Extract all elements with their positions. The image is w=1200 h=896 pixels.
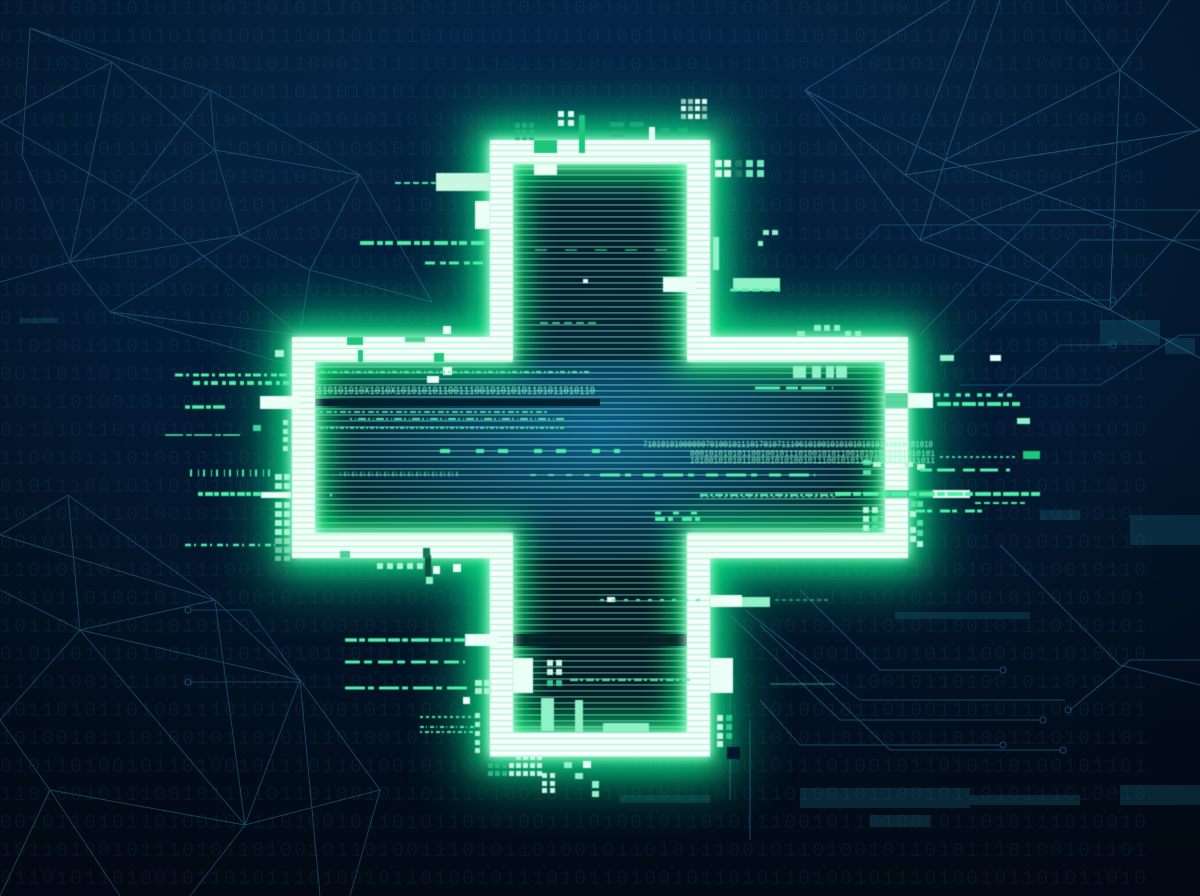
- faint binary code background: 1101001110110100101101011010010111001101011011010010111011010101101001110101101010: [0, 336, 1148, 359]
- bright glitch blocks: [260, 115, 1040, 797]
- bottom pixels: [488, 660, 732, 793]
- faint binary code background: 1101001011010111001011101001101011010010111010110100101101011010011101011010010110: [0, 560, 1148, 583]
- faint binary code background: 1011001011101011010011011101010011011010110100101101110100110101101001011011010101: [0, 280, 1148, 303]
- faint binary code background: 1110100101101011010010111011010010110100111010110100101101011100101101001011010111: [0, 672, 1148, 695]
- network mesh: top right: [805, 0, 1200, 358]
- left pixels: [253, 350, 491, 753]
- faint binary code background: 1011010011101011101001011011010110101110011010010111011010101101001110101101011101: [0, 139, 1148, 162]
- faint binary code background: 0101110110100101101011101011010010111011010110101110100101101011010010111011010110: [0, 252, 1148, 275]
- right streaks: [935, 393, 1015, 397]
- faint binary code background: 1010010111010010110101110100101101011010011011010010111010110100101101001110101101: [0, 728, 1148, 751]
- data streaks: [165, 183, 1040, 732]
- faint binary code background: 0011010110100111010110100101110100101101011010010110111010010110100110101110100101: [0, 700, 1148, 723]
- cross outer glow: [304, 152, 896, 745]
- scan lines: [315, 168, 885, 733]
- network mesh: bottom left: [0, 495, 380, 896]
- inside streaks: [320, 371, 590, 373]
- faint binary code background: 0110111001011011010111010101101110110110101101110110010110111010101101011101100110: [0, 110, 1148, 133]
- glowing binary code text: [317, 386, 935, 466]
- faint binary code background: 1011101001011010111001011011010011101011010010110111010110100101101011101101001011: [0, 392, 1148, 415]
- right pixels: [863, 460, 925, 547]
- faint binary code background: 0011011010111010110010110101110100101101011101001011010110100101110101101001011011: [0, 364, 1148, 387]
- faint binary code background: 0010110101101001011101001011010110101001110100101101011100101101001011010111010010: [0, 812, 1148, 835]
- faint binary code background: 1011010010110101101110100101101001110101101001011011101001010110101100101110100101: [0, 616, 1148, 639]
- blue core light: [342, 335, 858, 558]
- dark shade in upper arm: [514, 299, 684, 360]
- faint binary code background: 0010111010110100110101101001011101011010010110101110010110100111010110100101101110: [0, 532, 1148, 555]
- top pixels: [558, 99, 764, 177]
- faint binary code background: 1011010110100101110100101101011101001011010011011101001011010110100101110110100101: [0, 504, 1148, 527]
- faint glitch bars: right and bottom: [20, 318, 1200, 827]
- mint blocks: [426, 230, 1030, 797]
- faint binary code background: 1011010010111010110100101101001110101101001011010111001011010010110101110100101101: [0, 840, 1148, 863]
- glowing binary code text: 0001010101011001001011101001010110010101010101010101: [690, 449, 935, 459]
- dark shade in lower arm: [524, 560, 674, 702]
- cross interior: [300, 150, 900, 750]
- dark navy square: [727, 747, 740, 759]
- faint binary code background: 1010110101111010110110110101011011011011001110101101010010111011010011101101011011: [0, 82, 1148, 105]
- glowing binary code text: 71010101000090701001011101701071110610100101010101010101010101010: [643, 439, 933, 450]
- faint binary code background: 1100101110100101101101010111010010110101101001011101011010010111010010110101110101: [0, 448, 1148, 471]
- network mesh: top left: [0, 28, 432, 365]
- faint binary code background: 0101101110100101101001011010111001011010110100101110101101001011010111001011010010: [0, 644, 1148, 667]
- glowing binary code text: 110101010X1010X10101010110011100101010101101011010110: [317, 386, 595, 398]
- cross neon outline: [292, 140, 908, 757]
- faint binary code background: 0011010111011001011011000111111011110111010010111011011100010101101101011100101101: [0, 54, 1148, 77]
- inner green edge glow: [304, 152, 896, 745]
- faint binary code background: 0110101101001011010111010010110100101110101101001011010110100101110100101101011010: [0, 868, 1148, 891]
- faint binary code background: 1101011101001011010110100111011010111010011011010111001011011010110101110100101101: [0, 167, 1148, 190]
- circuit traces: lower right: [185, 545, 1200, 840]
- pixel grids around the cross: [253, 99, 925, 793]
- glitch dark bands: [315, 399, 600, 406]
- faint binary code background: 0110110100101110101101001011101101011001011010111010110100101110100110101101110100: [0, 308, 1148, 331]
- faint binary code background: 0101110010110101101001011010111010010110111010011010110101101001011100101101011010: [0, 476, 1148, 499]
- faint binary code background: 1110101001011011101011010010110101101001011101100101101011101001101011011010010111: [0, 224, 1148, 247]
- faint binary code background: 0110110100101110100101101011101001011010110101001011101010010110101110010110101101: [0, 588, 1148, 611]
- faint binary code background: 0010110110111010010110111010110110010111010110100110111010011010111011010010111010: [0, 195, 1148, 218]
- left streaks: [175, 374, 290, 376]
- faint binary code background: 0101101001011010010111011010010110101110100101101011001011101001011010110100101101: [0, 756, 1148, 779]
- glowing binary code text: 1010010101011001010101001011100101011010010101011011: [690, 457, 935, 466]
- faint binary code background: 0110101101001011101100110101001011011101001110101101001101011010110100101110011010: [0, 420, 1148, 443]
- faint binary code background: 0101100111010110100111011010110100101110110100110101110101001011011010111010011010: [0, 26, 1148, 49]
- green blocks: [340, 115, 1040, 577]
- circuit traces: upper right: [835, 210, 1200, 395]
- faint binary code background: 1101001011100101101011010010110111010010110100101110101101001011001011010111010010: [0, 784, 1148, 807]
